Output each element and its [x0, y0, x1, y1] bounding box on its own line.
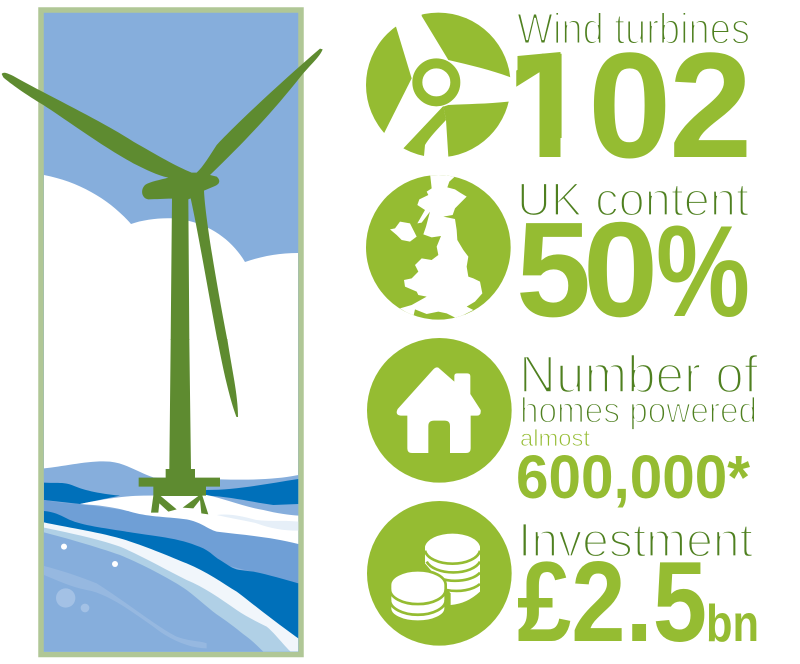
- sea and waves: [44, 461, 298, 653]
- heading: Investment: [518, 514, 754, 568]
- turbine: [2, 49, 323, 514]
- number: 600,000*: [516, 443, 750, 511]
- clouds: [44, 175, 298, 480]
- heading: Wind turbines: [517, 6, 750, 54]
- panel: turbine illustration: [2, 10, 323, 654]
- almost label: almost: [520, 425, 591, 451]
- stat: investment: [517, 514, 759, 664]
- frame and sky: [41, 10, 301, 654]
- stat: wind turbines: [500, 6, 752, 189]
- turbine blades and nacelle: [2, 49, 323, 340]
- icon: UK map circle: [366, 173, 511, 320]
- bubbles: [56, 544, 118, 612]
- amount: £2.5: [517, 539, 707, 664]
- heading line one: Number of: [519, 346, 758, 404]
- heading line two: homes powered: [520, 390, 757, 430]
- icon: wind turbine circle: [366, 12, 510, 157]
- number: 50: [516, 194, 658, 345]
- stat: UK content: [516, 174, 750, 345]
- heading: UK content: [517, 174, 749, 226]
- icon: house circle: [367, 338, 512, 483]
- unit: bn: [706, 595, 759, 653]
- percent sign: %: [656, 198, 750, 344]
- number: 102: [506, 21, 752, 189]
- stat: homes powered: [516, 346, 758, 511]
- icon: coins circle: [367, 501, 512, 646]
- tower and lower blade: [169, 339, 238, 470]
- floating foundation: [139, 469, 220, 514]
